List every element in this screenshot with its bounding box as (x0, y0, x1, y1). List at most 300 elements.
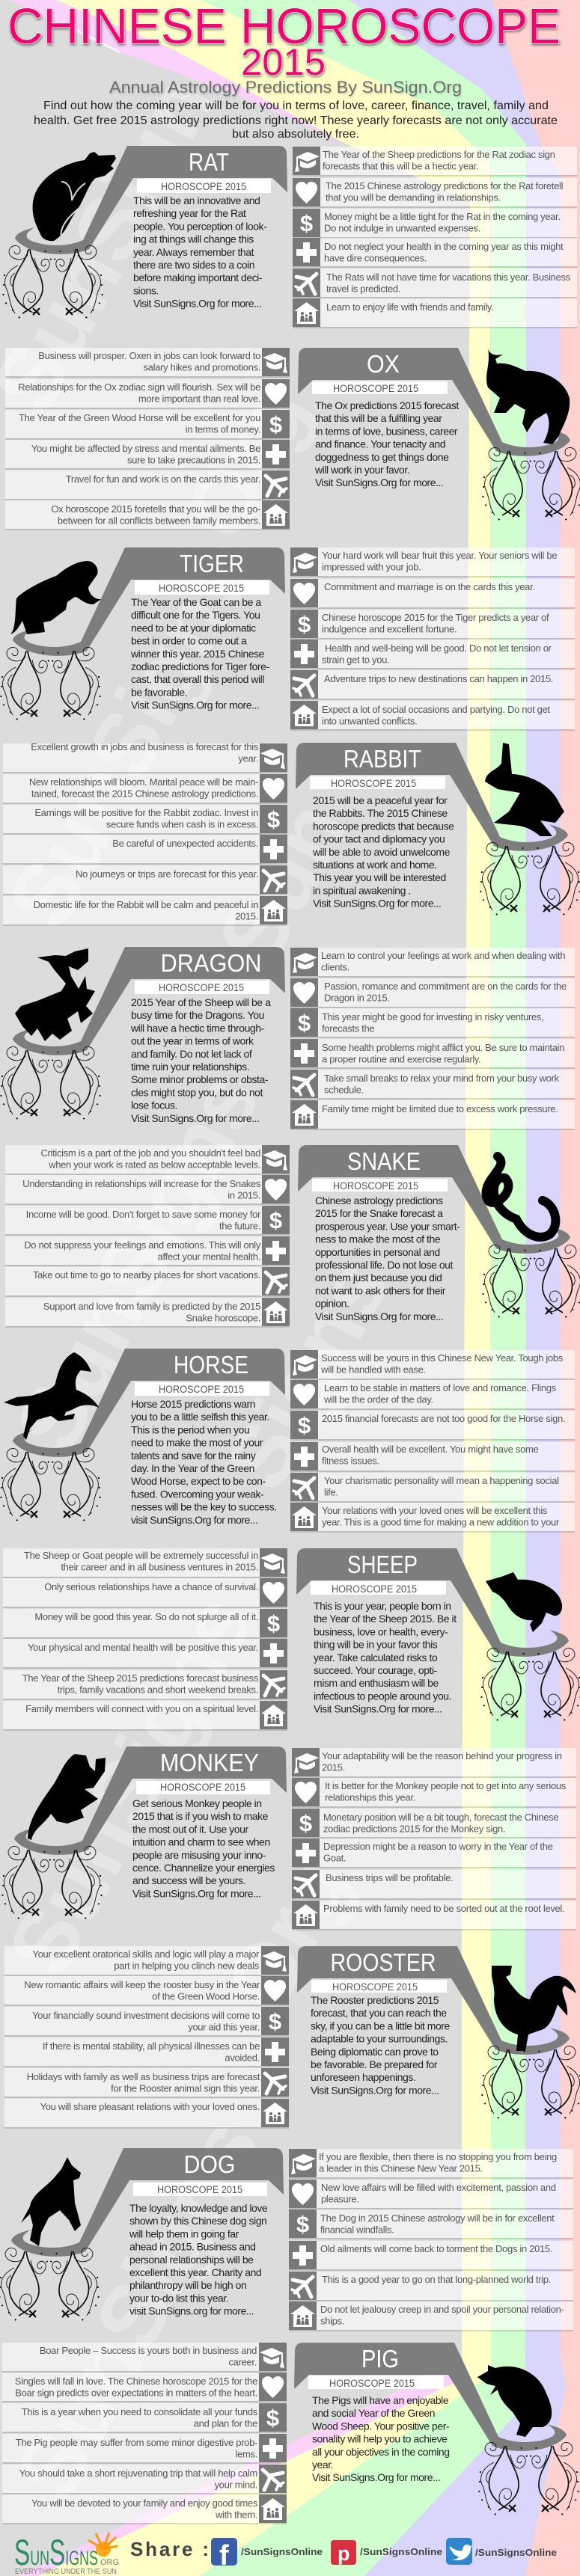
row: money: Monetary position will be a bit tough, forecast the Chinese (323, 1812, 558, 1823)
row: career: career. (228, 2356, 257, 2368)
share label: Share : (130, 2538, 209, 2560)
sign description: cence. Channelize your energies (132, 1862, 275, 1874)
sign description: This will be an innovative and (133, 194, 260, 206)
row: money: Do not indulge in unwanted expenses. (324, 223, 480, 233)
panel: snake (5, 1145, 580, 1328)
sign description: nesses will be the key to success. (131, 1501, 277, 1513)
row: career: impressed with your job. (322, 561, 421, 573)
subtitle box: HOROSCOPE 2015 (333, 1180, 418, 1192)
row: family (290, 1100, 575, 1130)
ribbon: dog (11, 2148, 284, 2257)
row: love (2, 2373, 287, 2402)
sign description: Some minor problems or obsta- (131, 1073, 269, 1085)
sign description: lose focus. (131, 1100, 177, 1111)
row: money: Money will be good this year. So do not splurge all of it. (34, 1611, 258, 1622)
sign name: RABBIT (344, 745, 421, 773)
sign description: sky, if you can be a little bit more (311, 2020, 451, 2031)
intro text (34, 99, 558, 141)
sign description: Visit SunSigns.Org for more... (133, 298, 261, 310)
sign description: thing will be in your favor this (314, 1639, 438, 1651)
subtitle box: HOROSCOPE 2015 (160, 1782, 245, 1793)
row: love: New relationships will bloom. Marital peace will be main- (29, 776, 258, 788)
row: love (290, 978, 575, 1008)
row: family: Family members will connect with you on a spiritual level. (25, 1703, 258, 1714)
sign description: The Rooster predictions 2015 (311, 1994, 439, 2006)
row: career: forecasts that this will be a hectic year. (323, 160, 478, 172)
row: career (293, 147, 577, 177)
sign description: difficult one for the Tigers. You (131, 609, 260, 621)
intro text: but also absolutely free. (232, 128, 359, 141)
row: travel (289, 2272, 573, 2301)
sign description: This year you will be interested (313, 871, 446, 883)
ornament: sheep (481, 1648, 580, 1723)
panel: rabbit (3, 741, 580, 926)
row: health: Health and well-being will be good. Do not let tension or (325, 643, 552, 654)
row: money (290, 610, 575, 640)
forecast rows (293, 147, 577, 328)
row: family (2, 2494, 287, 2524)
row: career: when your work is rated as below acceptable levels. (48, 1159, 260, 1170)
ornament: horse (1, 1448, 100, 1524)
row: health: If there is mental stability, all physical illnesses can be (43, 2040, 260, 2052)
row: travel (3, 865, 287, 895)
sign description: fused. Overcoming your weak- (131, 1488, 264, 1500)
icon: sun (88, 2533, 117, 2557)
animal: dragon silhouette (15, 948, 95, 1041)
sign description: the Rabbits. The 2015 Chinese (313, 807, 448, 819)
subtitle box (312, 381, 448, 394)
sign description: need to be at your diplomatic (131, 622, 256, 634)
subtitle box (135, 580, 269, 595)
animal: monkey silhouette (28, 1754, 106, 1840)
subtitle box (137, 179, 271, 193)
row: love: in 2015. (228, 1189, 260, 1201)
row: money: Your financially sound investment decisions will come to (32, 2010, 260, 2021)
panel: rooster (4, 1946, 580, 2129)
subtitle box (136, 1781, 270, 1794)
row: money: financial windfalls. (320, 2224, 394, 2235)
row: travel: travel is predicted. (326, 283, 400, 295)
row: love: pleasure. (321, 2193, 359, 2205)
row: travel (5, 470, 290, 500)
row: career (290, 548, 575, 577)
sign name: DRAGON (160, 949, 262, 977)
animal: rat silhouette (33, 152, 116, 241)
sign description: on them just because you did (315, 1272, 442, 1284)
ornament: ox (483, 447, 580, 523)
sign name: SNAKE (347, 1147, 421, 1175)
row: travel: This is a good year to go on that long-planned world trip. (322, 2274, 551, 2285)
row: health: Depression might be a reason to worry in the Year of the (323, 1841, 553, 1852)
sign description: out the year in terms of work (131, 1035, 254, 1047)
row: career (3, 741, 287, 773)
row: love (292, 1778, 576, 1808)
row: money (5, 410, 290, 440)
ribbon: tiger (13, 548, 285, 656)
animal: sheep silhouette (486, 1572, 562, 1632)
sign description: cast, that overall this period will (131, 673, 264, 685)
row: money: $ (300, 210, 313, 236)
row: travel: Adventure trips to new destinations can happen in 2015. (324, 673, 553, 684)
sign description: 2015 Year of the Sheep will be a (131, 996, 271, 1008)
row: travel: trips, family vacations and short weekend breaks. (58, 1684, 258, 1695)
row: money: $ (267, 1610, 280, 1637)
sign description: in terms of love, business, career (315, 425, 458, 437)
row: family (3, 896, 287, 926)
sign description: that this will be a fulfilling year (315, 412, 442, 424)
row: health: Do not neglect your health in the coming year as this might (324, 241, 564, 252)
subtitle box (135, 1382, 269, 1396)
row: health: sure to take precautions in 2015. (127, 455, 260, 465)
row: love: of the Green Wood Horse. (152, 1991, 260, 2002)
row: career: Your excellent oratorical skills and logic will play a major (32, 1948, 260, 1960)
sign description: cles might stop you, but do not (131, 1086, 263, 1098)
row: career (5, 1145, 290, 1175)
title year: 2015 (241, 41, 326, 83)
facebook handle: /SunSignsOnline (241, 2546, 323, 2557)
row: career: their career and in all business ventures in 2015. (61, 1562, 258, 1572)
animal: tiger silhouette (10, 561, 101, 634)
animal: snake silhouette (486, 1156, 555, 1237)
row: health: The Pig people may suffer from some minor digestive prob- (16, 2437, 257, 2448)
subtitle box: HOROSCOPE 2015 (329, 2378, 415, 2389)
sign description: year. Always remember that (133, 246, 254, 258)
sign description: and finance. Your tenacity and (315, 438, 445, 450)
ribbon: horse (13, 1349, 285, 1457)
row: money (3, 805, 287, 835)
row: love (5, 379, 290, 409)
row: health: a proper routine and exercise regularly. (322, 1053, 480, 1065)
row: money: $ (298, 611, 311, 637)
row: family (5, 500, 290, 530)
panel: tiger (1, 548, 575, 731)
ribbon: monkey (14, 1747, 287, 1855)
row: money: This is a year when you need to consolidate all your funds (22, 2406, 258, 2417)
icon: facebook (211, 2538, 237, 2572)
sign description: situations at work and home. (313, 859, 437, 871)
row: career: Your hard work will bear fruit this year. Your seniors will be (322, 550, 557, 561)
row: health (290, 640, 575, 669)
ornament: rabbit (480, 842, 580, 918)
sign description: business, love or health, every- (314, 1625, 448, 1637)
row: family: 2015. (235, 911, 258, 921)
row: family (289, 2301, 573, 2331)
row: career: Your adaptability will be the reason behind your progress in (322, 1750, 562, 1761)
sign description: 2015 for the Snake forecast a (315, 1207, 443, 1219)
row: travel: life. (324, 1487, 338, 1497)
ribbon: rooster (297, 1946, 570, 2055)
row: career: Boar People – Success is yours both in business and (40, 2345, 257, 2356)
row: family: Learn to enjoy life with friends and family. (326, 301, 493, 313)
row: money: Earnings will be positive for the Rabbit zodiac. Invest in (34, 807, 258, 818)
row: career: Learn to control your feelings at work and when dealing with (321, 950, 565, 961)
row: career: The Year of the Sheep predictions for the Rat zodiac sign (323, 149, 555, 160)
forecast rows (5, 1145, 290, 1328)
row: travel: Take out time to go to nearby places for short vacations. (33, 1269, 260, 1281)
sign name: PIG (361, 2345, 399, 2373)
background: watermark lettering: Sun (198, 785, 366, 981)
row: love: Boar sign predicts over expectations in matters of the heart. (15, 2388, 257, 2398)
sign description: refreshing year for the Rat (133, 207, 246, 219)
sign description: prosperous year. Use your smart- (315, 1220, 460, 1232)
sign description: horoscope predicts that because (313, 820, 454, 832)
row: love: Singles will fall in love. The Chinese horoscope 2015 for the (15, 2376, 257, 2387)
subtitle box (311, 1980, 447, 1993)
sign description: Being diplomatic can prove to (311, 2046, 439, 2058)
row: health (4, 2037, 289, 2067)
ornament: snake (483, 1245, 580, 1320)
sign description: Visit SunSigns.Org for more... (313, 898, 441, 910)
row: health: Old ailments will come back to torment the Dogs in 2015. (320, 2243, 552, 2254)
sign description: Visit SunSigns.Org for more... (315, 476, 443, 488)
sign description: succeed. Your courage, opti- (314, 1664, 438, 1676)
row: money: Income will be good. Don't forget to save some money for (26, 1209, 261, 1220)
sign description: winner this year. 2015 Chinese (130, 648, 265, 660)
row: career (292, 1748, 576, 1778)
row: money: $ (296, 2211, 309, 2237)
row: health (290, 1442, 575, 1472)
row: career: If you are flexible, then there is no stopping you from being (319, 2151, 557, 2162)
sign description: in spiritual awakening . (313, 884, 411, 896)
sign description: be favorable. (131, 686, 187, 698)
row: travel: Holidays with family as well as business trips are forecast (27, 2071, 260, 2082)
subtitle box: HOROSCOPE 2015 (331, 778, 416, 789)
sign description: year. (312, 2459, 333, 2471)
row: travel: for the Rooster animal sign this year. (111, 2082, 260, 2094)
subtitle: Annual Astrology Predictions By SunSign.Org (109, 78, 462, 96)
row: money: 2015 financial forecasts are not too good for the Horse sign. (322, 1413, 565, 1424)
pinterest handle: /SunSignsOnline (360, 2546, 442, 2557)
animal: horse silhouette (4, 1352, 99, 1440)
ribbon: rabbit (296, 743, 568, 851)
logo wordmark: SUNSIGNS (14, 2533, 98, 2573)
row: money: your aid this year. (188, 2021, 260, 2033)
row: love: Only serious relationships have a chance of survival. (44, 1581, 258, 1592)
row: love (3, 774, 287, 804)
sign description: of your tact and diplomacy you (313, 833, 445, 845)
sign description: and success will be yours. (132, 1874, 245, 1886)
sign description: the most out of it. Use your (132, 1823, 248, 1835)
row: love: Dragon in 2015. (324, 992, 390, 1004)
row: health: Be careful of unexpected accidents. (112, 838, 258, 849)
footer: SunSigns logo (14, 2533, 119, 2576)
background: watermark lettering: .Org (153, 367, 329, 577)
row: love: It is better for the Monkey people not to get into any serious (325, 1780, 567, 1791)
row: health: lems. (236, 2449, 257, 2459)
row: health: Overall health will be excellent. You might have some (322, 1444, 539, 1455)
panel: rat (3, 146, 577, 328)
panel: pig (2, 2343, 579, 2524)
ribbon: ox (298, 348, 570, 456)
row: travel: The Rats will not have time for vacations this year. Business (326, 272, 571, 283)
row: travel: Take small breaks to relax your mind from your busy work (324, 1073, 560, 1084)
subtitle box (308, 2376, 444, 2389)
row: health: have dire consequences. (324, 253, 427, 263)
row: travel (293, 269, 577, 298)
row: money: $ (269, 411, 282, 438)
forecast rows (5, 348, 290, 530)
subtitle box: HOROSCOPE 2015 (157, 2184, 242, 2195)
sign description: philanthropy will be high on (129, 2279, 246, 2291)
sign description: 2015 will be a peaceful year for (313, 794, 448, 806)
ornament: pig (479, 2442, 579, 2518)
row: family: Problems with family need to be sorted out at the root level. (323, 1903, 564, 1914)
row: travel: The Year of the Sheep 2015 predictions forecast business (22, 1672, 259, 1684)
subtitle box (311, 1581, 446, 1595)
sign description: need to make the most of your (131, 1437, 263, 1449)
forecast rows (290, 948, 575, 1130)
sign name: ROOSTER (331, 1948, 436, 1976)
icon: pinterest (331, 2540, 356, 2565)
panel: horse (1, 1349, 575, 1533)
row: health (3, 835, 287, 865)
row: money (5, 1206, 290, 1236)
row: health (5, 1236, 290, 1266)
subtitle box: HOROSCOPE 2015 (161, 181, 246, 192)
icon: facebook: f (219, 2540, 229, 2572)
sign description: Visit SunSigns.Org for more... (314, 1703, 442, 1715)
row: family: between for all conflicts between family members. (58, 515, 260, 527)
sign description: Get serious Monkey people in (132, 1797, 262, 1809)
row: career: Success will be yours in this Chinese New Year. Tough jobs (321, 1352, 564, 1364)
row: money: $ (266, 2405, 279, 2431)
sign description: ing at things will change this (133, 233, 254, 245)
row: money: $ (299, 1810, 312, 1836)
row: money: in terms of money. (186, 423, 260, 435)
animal: pig silhouette (477, 2365, 552, 2437)
panel: ox (5, 348, 580, 530)
row: career (290, 1350, 575, 1380)
row: money: $ (269, 1207, 282, 1233)
logo org: ORG (100, 2558, 119, 2567)
row: health: Some health problems might afflict you. Be sure to maintain (322, 1042, 564, 1053)
sign description: visit SunSigns.org for more... (129, 2305, 254, 2317)
panel: sheep (3, 1548, 580, 1731)
subtitle box (312, 1179, 448, 1192)
row: career (289, 2149, 573, 2179)
row: career: year. (238, 752, 258, 764)
ornament: dog (0, 2248, 99, 2323)
sign description: busy time for the Dragons. You (131, 1009, 264, 1021)
row: health: You might be affected by stress and mental ailments. Be (31, 443, 260, 454)
sign name: TIGER (180, 550, 244, 577)
background: watermark lettering (0, 16, 409, 2515)
sign name: OX (367, 350, 400, 378)
row: career: Business will prosper. Oxen in jobs can look forward to (38, 350, 260, 361)
row: travel: Business trips will be profitable. (326, 1872, 453, 1883)
sign description: Horse 2015 predictions warn (131, 1398, 255, 1410)
intro text: Find out how the coming year will be for you in terms of love, career, finance, travel, family and (43, 99, 549, 112)
row: family: Family time might be limited due to excess work pressure. (322, 1103, 558, 1114)
row: love (293, 178, 577, 208)
sign name: MONKEY (160, 1749, 259, 1776)
sign description: Visit SunSigns.Org for more... (132, 1887, 260, 1899)
subtitle box (135, 981, 269, 994)
row: travel: your mind. (214, 2479, 257, 2491)
subtitle box (133, 2183, 267, 2196)
row: love: Relationships for the Ox zodiac sign will flourish. Sex will be (18, 381, 260, 393)
sign name: RAT (189, 148, 229, 176)
sign description: the Year of the Sheep 2015. Be it (314, 1613, 457, 1625)
row: travel (290, 1070, 575, 1100)
row: career (4, 1946, 289, 1976)
sign description: and social Year of the Green (312, 2407, 435, 2419)
row: travel: schedule. (324, 1085, 364, 1095)
sign description: zodiac predictions for Tiger fore- (131, 660, 269, 672)
row: love: will be the order of the day. (323, 1394, 433, 1405)
sign description: unforeseen happenings. (311, 2071, 415, 2083)
row: career (5, 348, 290, 378)
subtitle box: HOROSCOPE 2015 (332, 1583, 417, 1595)
panel: dragon (1, 947, 575, 1130)
sign description: The loyalty, knowledge and love (129, 2202, 268, 2214)
row: family: into unwanted conflicts. (322, 715, 417, 727)
row: money: The Year of the Green Wood Horse will be excellent for you (19, 412, 260, 423)
sign description: doggedness to get things done (315, 451, 449, 463)
row: family (293, 298, 577, 328)
sign description: Chinese astrology predictions (315, 1195, 443, 1206)
sign description: your to-do list this year. (129, 2292, 228, 2304)
ornament: monkey (2, 1846, 102, 1922)
row: money: $ (298, 1010, 311, 1036)
row: family: Snake horoscope. (186, 1312, 260, 1324)
row: money (2, 2403, 287, 2433)
animal: rabbit silhouette (485, 743, 564, 836)
sign description: talents and save for the rainy (131, 1450, 256, 1462)
row: love: that you will be demanding in relationships. (326, 191, 501, 203)
row: career (2, 2343, 287, 2373)
sign description: The Pigs will have an enjoyable (312, 2394, 449, 2406)
sign description: people are misusing your inno- (132, 1849, 266, 1861)
row: career (3, 1548, 287, 1578)
row: career: The Sheep or Goat people will be extremely successful in (24, 1550, 258, 1561)
ornament: rooster (482, 2046, 580, 2121)
row: family: Expect a lot of social occasions and partying. Do not get (322, 704, 550, 715)
background: watermark lettering: SunSigns (0, 1055, 279, 1468)
sign description: best in order to come out a (131, 635, 247, 647)
sign description: infectious to people around you. (314, 1690, 451, 1702)
row: travel (4, 2068, 289, 2098)
row: health (2, 2434, 287, 2464)
row: travel (3, 1670, 287, 1700)
row: health: Your physical and mental health will be positive this year. (28, 1642, 258, 1653)
row: love: Understanding in relationships will increase for the Snakes (22, 1178, 261, 1189)
title: CHINESE HOROSCOPE (7, 0, 561, 55)
ribbon: dragon (13, 947, 285, 1055)
sign description: Visit SunSigns.Org for more... (311, 2084, 439, 2096)
animal: dog silhouette (21, 2157, 81, 2246)
row: money (292, 1809, 576, 1839)
ribbon: pig (294, 2343, 567, 2451)
sign description: ness to make the most of the (315, 1233, 441, 1245)
row: travel: Your charismatic personality will mean a happening social (324, 1475, 559, 1486)
row: career (290, 948, 575, 978)
sign description: day. In the Year of the Green (131, 1462, 254, 1474)
row: love: tained, forecast the 2015 Chinese astrology predictions. (31, 788, 258, 799)
row: money (290, 1008, 575, 1038)
sign description: will work in your favor. (314, 464, 409, 476)
sign description: will have a hectic time through- (130, 1022, 265, 1034)
row: health (289, 2241, 573, 2271)
ornament: dragon (1, 1046, 100, 1122)
ribbon: sheep (296, 1548, 569, 1657)
row: love: Passion, romance and commitment are on the cards for the (324, 981, 567, 992)
sign description: not want to ask others for their (315, 1284, 446, 1296)
forecast rows (289, 2149, 573, 2331)
sign description: sions. (133, 284, 159, 296)
sign description: time ruin your relationships. (131, 1061, 249, 1073)
row: family: You will share pleasant relations with your loved ones. (40, 2101, 260, 2112)
